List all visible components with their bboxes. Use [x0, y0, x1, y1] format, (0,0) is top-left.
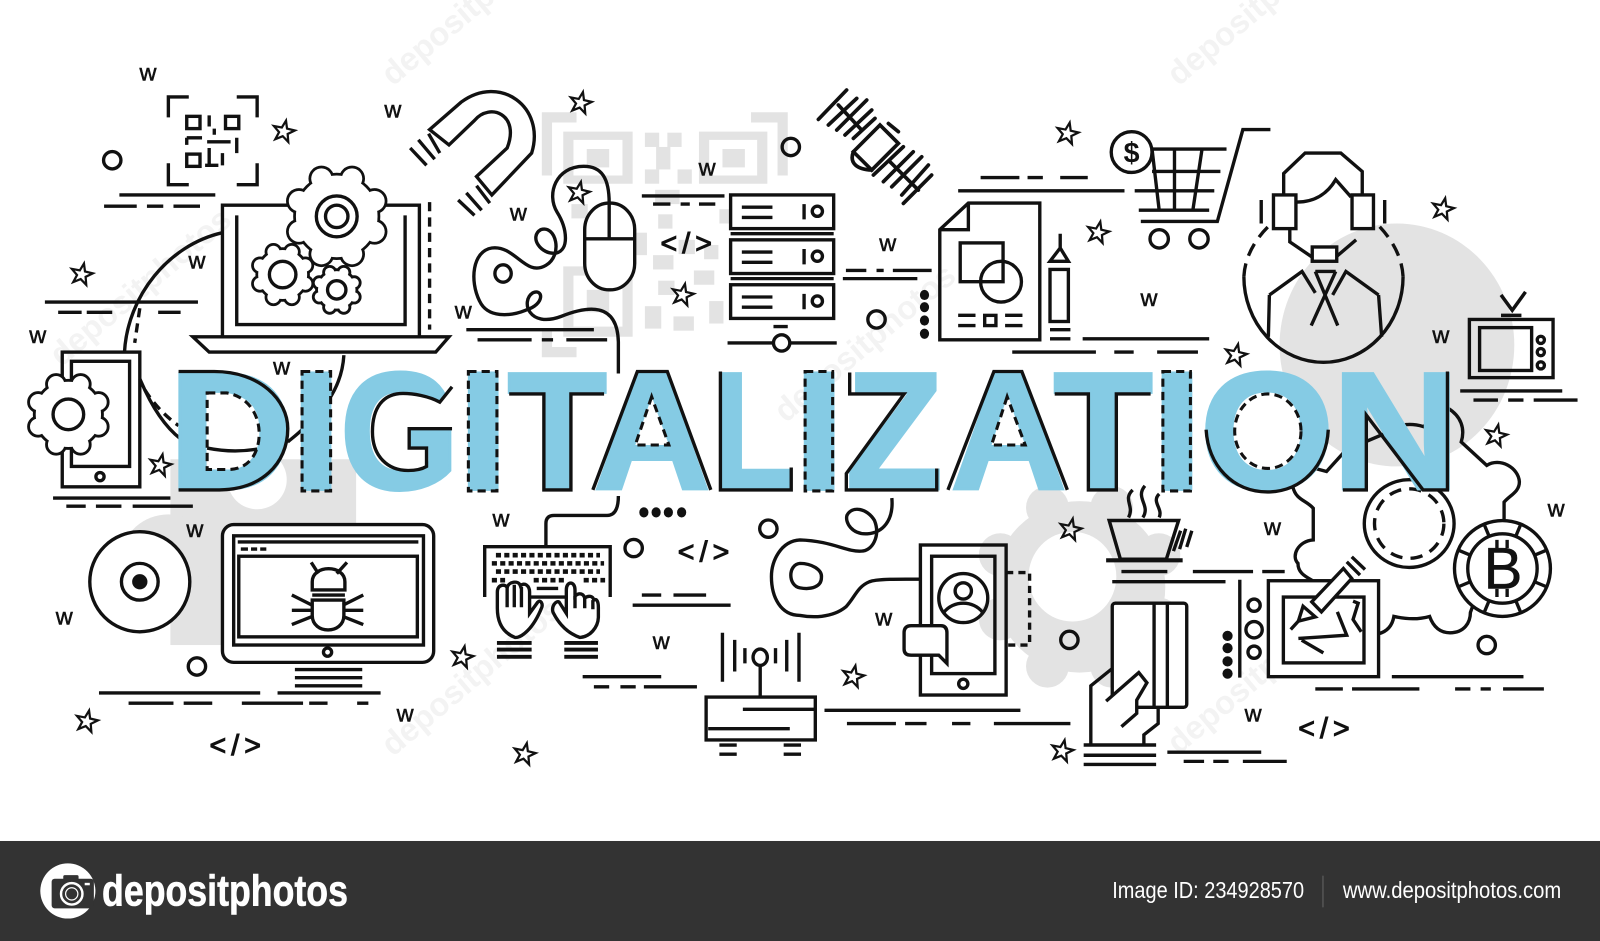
w letter marks: w	[28, 322, 46, 348]
icon: keyboard and hands	[485, 496, 618, 657]
dots column	[1222, 631, 1233, 679]
w letter marks: w	[1263, 514, 1281, 540]
title: G	[340, 338, 459, 525]
dots row	[639, 507, 686, 517]
title: D	[168, 338, 293, 525]
w letter marks: w	[698, 155, 716, 181]
grey puzzle behind monitor	[122, 450, 356, 645]
code tags: </>	[660, 228, 717, 260]
decorative lines	[45, 178, 1578, 761]
small circles	[104, 138, 1495, 675]
icon: server rack	[728, 195, 837, 351]
icon: compact disc	[90, 532, 190, 632]
icon: smartphone with profile	[771, 498, 1030, 695]
logo icon: camera	[40, 863, 95, 919]
icon: shopping cart	[1111, 130, 1270, 248]
watermarks: depositphotos	[1159, 588, 1355, 761]
footer bar	[0, 841, 1600, 941]
title: I	[1151, 338, 1203, 525]
icon: bitcoin chip	[1454, 521, 1550, 616]
dashed I letters	[302, 372, 1190, 491]
big gear	[289, 168, 385, 264]
code tags	[209, 228, 1355, 762]
icon: phone with gear	[30, 352, 140, 487]
icon: document and pencil	[940, 203, 1070, 340]
icon: QR scanner	[168, 97, 257, 185]
letter outlines	[179, 372, 1447, 492]
dots	[920, 290, 929, 339]
title: T	[1053, 338, 1153, 525]
w letter marks: w	[55, 604, 73, 630]
icon: shopping cart: $	[1124, 137, 1140, 169]
watermarks: depositphotos	[766, 256, 962, 429]
title: I	[793, 338, 845, 525]
w letter marks: w	[272, 354, 290, 380]
icon: monitor with bug	[222, 525, 434, 686]
title	[168, 338, 1460, 525]
code tags: </>	[678, 536, 734, 568]
watermarks	[42, 0, 1355, 763]
w letter marks: w	[652, 628, 670, 654]
title: A	[593, 338, 711, 525]
w letter marks: w	[138, 60, 156, 86]
grey QR code	[542, 112, 788, 357]
stars	[69, 90, 1509, 765]
icon: drawing tablet with pencil	[1240, 557, 1379, 678]
watermarks: depositphotos	[42, 200, 238, 373]
w letter marks: w	[454, 297, 472, 323]
middle gear	[254, 246, 311, 303]
title: L	[713, 338, 794, 525]
title: N	[1332, 338, 1460, 525]
title: Z	[846, 338, 943, 525]
w letter marks: w	[509, 199, 527, 225]
icon: hand holding credit card	[1084, 603, 1187, 764]
image id: Image ID: 234928570	[1112, 877, 1304, 903]
dashed counters	[207, 393, 1301, 469]
title: A	[951, 338, 1067, 525]
icon: television	[1469, 292, 1553, 378]
title: O	[1200, 338, 1334, 525]
w letter marks: w	[187, 247, 205, 273]
title: I	[290, 338, 342, 525]
grey background shapes	[122, 112, 1514, 688]
w letter marks: w	[1547, 495, 1565, 521]
bug	[292, 562, 363, 630]
w letter marks: w	[1244, 701, 1262, 727]
title: T	[507, 338, 607, 525]
icon: magnet	[410, 92, 534, 215]
icon: large gear outline	[1293, 408, 1519, 634]
small gear	[315, 268, 359, 312]
icon: laptop with gears	[124, 168, 449, 442]
w letter marks: w	[396, 701, 414, 727]
logo text: depositphotos	[102, 866, 348, 915]
icon: computer mouse and cable	[474, 166, 635, 374]
w letter marks: w	[878, 230, 896, 256]
code tags: </>	[209, 730, 266, 762]
w letter marks: w	[185, 516, 203, 542]
grey circle behind avatar	[1280, 224, 1514, 466]
icon: router	[706, 633, 815, 754]
w letter marks	[28, 60, 1565, 727]
icon: satellite	[818, 90, 932, 203]
icon: support agent avatar	[1244, 153, 1403, 362]
right hand	[553, 583, 598, 637]
cable arcs	[124, 233, 344, 442]
grey gear behind phone	[979, 486, 1180, 688]
w letter marks: w	[492, 506, 510, 532]
website: www.depositphotos.com	[1342, 877, 1561, 903]
w letter marks: w	[1431, 322, 1449, 348]
w letter marks: w	[1140, 285, 1158, 311]
w letter marks: w	[383, 96, 401, 122]
title: I	[457, 338, 509, 525]
code tags: </>	[1298, 713, 1355, 745]
w letter marks: w	[874, 605, 892, 631]
watermarks: depositphotos	[374, 590, 570, 763]
left hand	[497, 582, 542, 638]
icon: bitcoin chip: B	[1484, 536, 1522, 601]
icon: coffee cup	[1106, 486, 1192, 560]
